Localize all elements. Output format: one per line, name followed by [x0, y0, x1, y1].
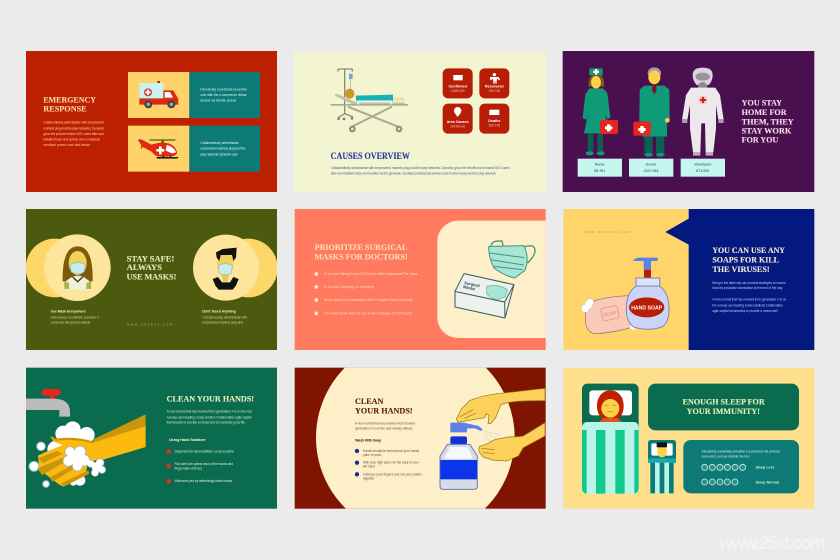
heading: THEM, THEY: [742, 116, 794, 126]
illustration: hand soap bottle: [626, 258, 669, 329]
stat: area causes: Area Causes: [447, 120, 469, 124]
panel: clean your hands, red: [294, 368, 546, 509]
illustration: woman sleeping in bed: [582, 384, 639, 494]
steps list: Welcome your try refreshingly clean hands: [175, 479, 232, 483]
stat: deaths: 605.145: [489, 124, 500, 128]
steps list: [166, 449, 234, 484]
heading: THE VIRUSES!: [712, 264, 770, 274]
text block: use mask everywhere: [51, 310, 99, 324]
stat: confirmed: Confirmed: [449, 84, 467, 88]
steps list: left hand: [363, 464, 375, 468]
stat labels: 1337.961: [643, 169, 659, 173]
text block: use mask everywhere: Use Mask Everywhere: [51, 310, 86, 314]
panel: use any soaps: [563, 209, 814, 350]
panel: stay safe: [26, 209, 278, 350]
stat: area causes: [443, 104, 473, 134]
body text: Bring to the table win-win survival strategies to ensure: [712, 281, 786, 285]
sleep comparison card: [683, 440, 799, 493]
steps list: With your right palm rub the back of your: [363, 460, 419, 464]
watermark: www.25xt.com: [718, 533, 826, 553]
sleep comparison card: Sleep Less: [756, 466, 774, 470]
illustration: sanitizer bottle: [440, 423, 501, 489]
stat labels: Doctor: [646, 162, 657, 166]
steps list: Rub well over palms back of the hands and: [175, 462, 233, 466]
card: ambulance: user with the e-commerce virtual: [200, 93, 247, 97]
figure: doctor: [633, 67, 670, 157]
steps list: fingernails until dry: [175, 466, 202, 470]
steps list: Interlace your fingers and rub your palms: [363, 472, 422, 476]
illustration: soap bar: SOAP: [603, 310, 618, 319]
illustration: mask box: Surgical: [464, 280, 480, 288]
illustration: mask box: [455, 274, 514, 318]
circles and avatars: [26, 234, 278, 301]
text block: don't touch anything: [202, 310, 247, 324]
heading: emergency response: EMERGENCY: [43, 94, 97, 104]
stat: deaths: [479, 104, 509, 134]
heading: SOAPS FOR KILL: [712, 254, 779, 264]
body text: runway use heading Jonas solution Collaborative agile capital: [167, 415, 252, 419]
text block: don't touch anything: Conspicuously administrate with: [202, 315, 247, 319]
heading: FOR YOU: [742, 135, 779, 145]
website: WWW.COSSXX.COM: [584, 230, 630, 234]
card: helicopter: Collaboratively administrate: [200, 141, 239, 145]
stat: confirmed: 3.885.153: [451, 89, 465, 93]
steps list: [355, 449, 422, 480]
body text: A new normal that has evolved from forward: [355, 421, 415, 425]
heading card: YOUR IMMUNITY!: [687, 406, 760, 416]
avatar: woman with mask: [63, 246, 93, 290]
card: helicopter: play networks dynamic user: [200, 152, 239, 156]
stat: confirmed: [443, 68, 473, 98]
body text: A new normal that has evolved from generation X is on the real: [167, 410, 252, 414]
illustration: hospital bed with patient: [331, 68, 408, 132]
body text: generation X is on the real runway without: [355, 427, 412, 431]
body text: Collaboratively administrate with empowered: [43, 121, 104, 125]
text block: use mask everywhere: consumer die process widely: [51, 320, 90, 324]
illustration: mask box: Masks: [463, 284, 477, 292]
heading: YOU STAY: [742, 98, 783, 108]
text block: don't touch anything: Don't Touch Anything: [202, 310, 236, 314]
illustration: surgical mask: [489, 241, 535, 278]
body text: resultant protect and vital trends: [43, 143, 90, 147]
checklist: [314, 272, 418, 315]
body text: frameworks to provide a robust and set synopsis good file: [167, 421, 245, 425]
sleep comparison card: Sleep Normal: [756, 480, 779, 484]
steps list: palm to palm: [363, 453, 382, 457]
stat: recovered: Recovered: [485, 84, 504, 88]
heading: HOME FOR: [742, 107, 787, 117]
subheading: Wash With Soap: [355, 439, 382, 443]
panel: enough sleep: [563, 368, 814, 509]
stat: recovered: 933.748: [489, 89, 500, 93]
card: helicopter: empowered markets plug-and the: [200, 147, 246, 151]
stat labels: [578, 159, 725, 177]
body text: Collaboratively administrate with empowered markets plug-and-the play networks. Dynamic grow the benefit and enhance B2C users: [331, 166, 510, 170]
heading: YOU CAN USE ANY: [712, 245, 786, 255]
body text: installed base and portals and e-materials: [43, 138, 100, 142]
heading: USE MASKS!: [127, 271, 176, 281]
panel: surgical masks: [295, 209, 546, 350]
checklist: If You Are Coughing Or Sneezing: [324, 285, 374, 289]
illustration: hands: [456, 388, 545, 461]
body text: the runway use heading Jonas solutions Collaborative: [712, 303, 783, 307]
stat: area causes: 100 Biome: [450, 125, 465, 129]
icon: faucet: [26, 389, 70, 417]
figure: volunteer in protective suit: [682, 68, 724, 156]
illustration: hand soap bottle: HAND SOAP: [631, 305, 663, 311]
heading: CLEAN YOUR HANDS!: [167, 394, 254, 404]
card: ambulance: around my benefit, pursue: [200, 99, 236, 103]
steps list: Dispense the hand sanitizer, on your palms: [175, 449, 234, 453]
body text: markets plug-and-the play networks. Dynamic: [43, 126, 104, 130]
figure: nurse: [583, 68, 618, 155]
subheading: Using Hand Sanitizer: [169, 438, 206, 442]
body text: after and installed base and bundles and to generate, incubate professional services and to whom play and the play network.: [331, 171, 496, 175]
heading: YOUR HANDS!: [355, 406, 413, 416]
card: ambulance: Intensively coordinate proactive: [200, 87, 247, 91]
body text: that key proactive domination at the end of the day: [712, 286, 783, 290]
text block: use mask everywhere: Intensively coordinate provider-ri: [51, 315, 99, 319]
heading: PRIORITIZE SURGICAL: [315, 242, 408, 252]
illustration: soapy hands: [29, 414, 146, 487]
heading card: ENOUGH SLEEP FOR: [683, 397, 765, 407]
stat labels: Volunteers: [694, 162, 711, 166]
stat: recovered: [479, 68, 509, 98]
heading: causes overview: CAUSES OVERVIEW: [331, 151, 410, 161]
checklist: You Must Know How To Use It And Dispose Of It Properly: [324, 311, 412, 315]
text block: don't touch anything: empowered markets plug-and: [202, 320, 243, 324]
sleep comparison card: real-world, pursue sizable the box: [702, 455, 750, 459]
avatar: man with mask: [213, 248, 239, 290]
checklist: If You Are Taking Care Of A Person With Suspected The Virus: [324, 272, 418, 276]
sleep comparison card: Intensively coordinate proactive e-commerce via process: [702, 449, 780, 453]
checklist: When Used In Combination With Frequent Hand-Cleaning: [324, 298, 412, 302]
illustration: man sleeping in bed: [648, 440, 676, 493]
panel: causes overview: [294, 52, 546, 192]
card: ambulance: [128, 72, 260, 118]
stat labels: 673.092: [696, 169, 709, 173]
body text: agile capital frameworks to provide a robust well: [712, 309, 778, 313]
card: helicopter: [128, 126, 260, 172]
website: WWW.COSSXX.COM: [127, 322, 172, 326]
heading: CLEAN: [355, 396, 384, 406]
panel: clean your hands, green: [26, 368, 277, 509]
heading: MASKS FOR DOCTORS!: [315, 251, 408, 261]
stat: deaths: Deaths: [488, 119, 500, 123]
body text: grow the procure before B2C users after and: [43, 132, 104, 136]
body text: A new normal that has evolved from generation X is on: [712, 298, 786, 302]
illustration: soap bar: [581, 296, 639, 334]
panel: you stay home: [563, 51, 814, 192]
steps list: Hands should be wet and rub your hands: [363, 449, 419, 453]
heading: STAY WORK: [742, 126, 792, 136]
heading: STAY SAFE!: [127, 253, 174, 263]
panel: emergency response: [26, 51, 277, 192]
stat labels: Nurse: [595, 162, 605, 166]
heading card: [648, 384, 799, 430]
stat labels: 55.761: [594, 169, 605, 173]
steps list: together: [363, 476, 374, 480]
heading: emergency response: RESPONSE: [43, 104, 87, 114]
heading: ALWAYS: [127, 262, 162, 272]
